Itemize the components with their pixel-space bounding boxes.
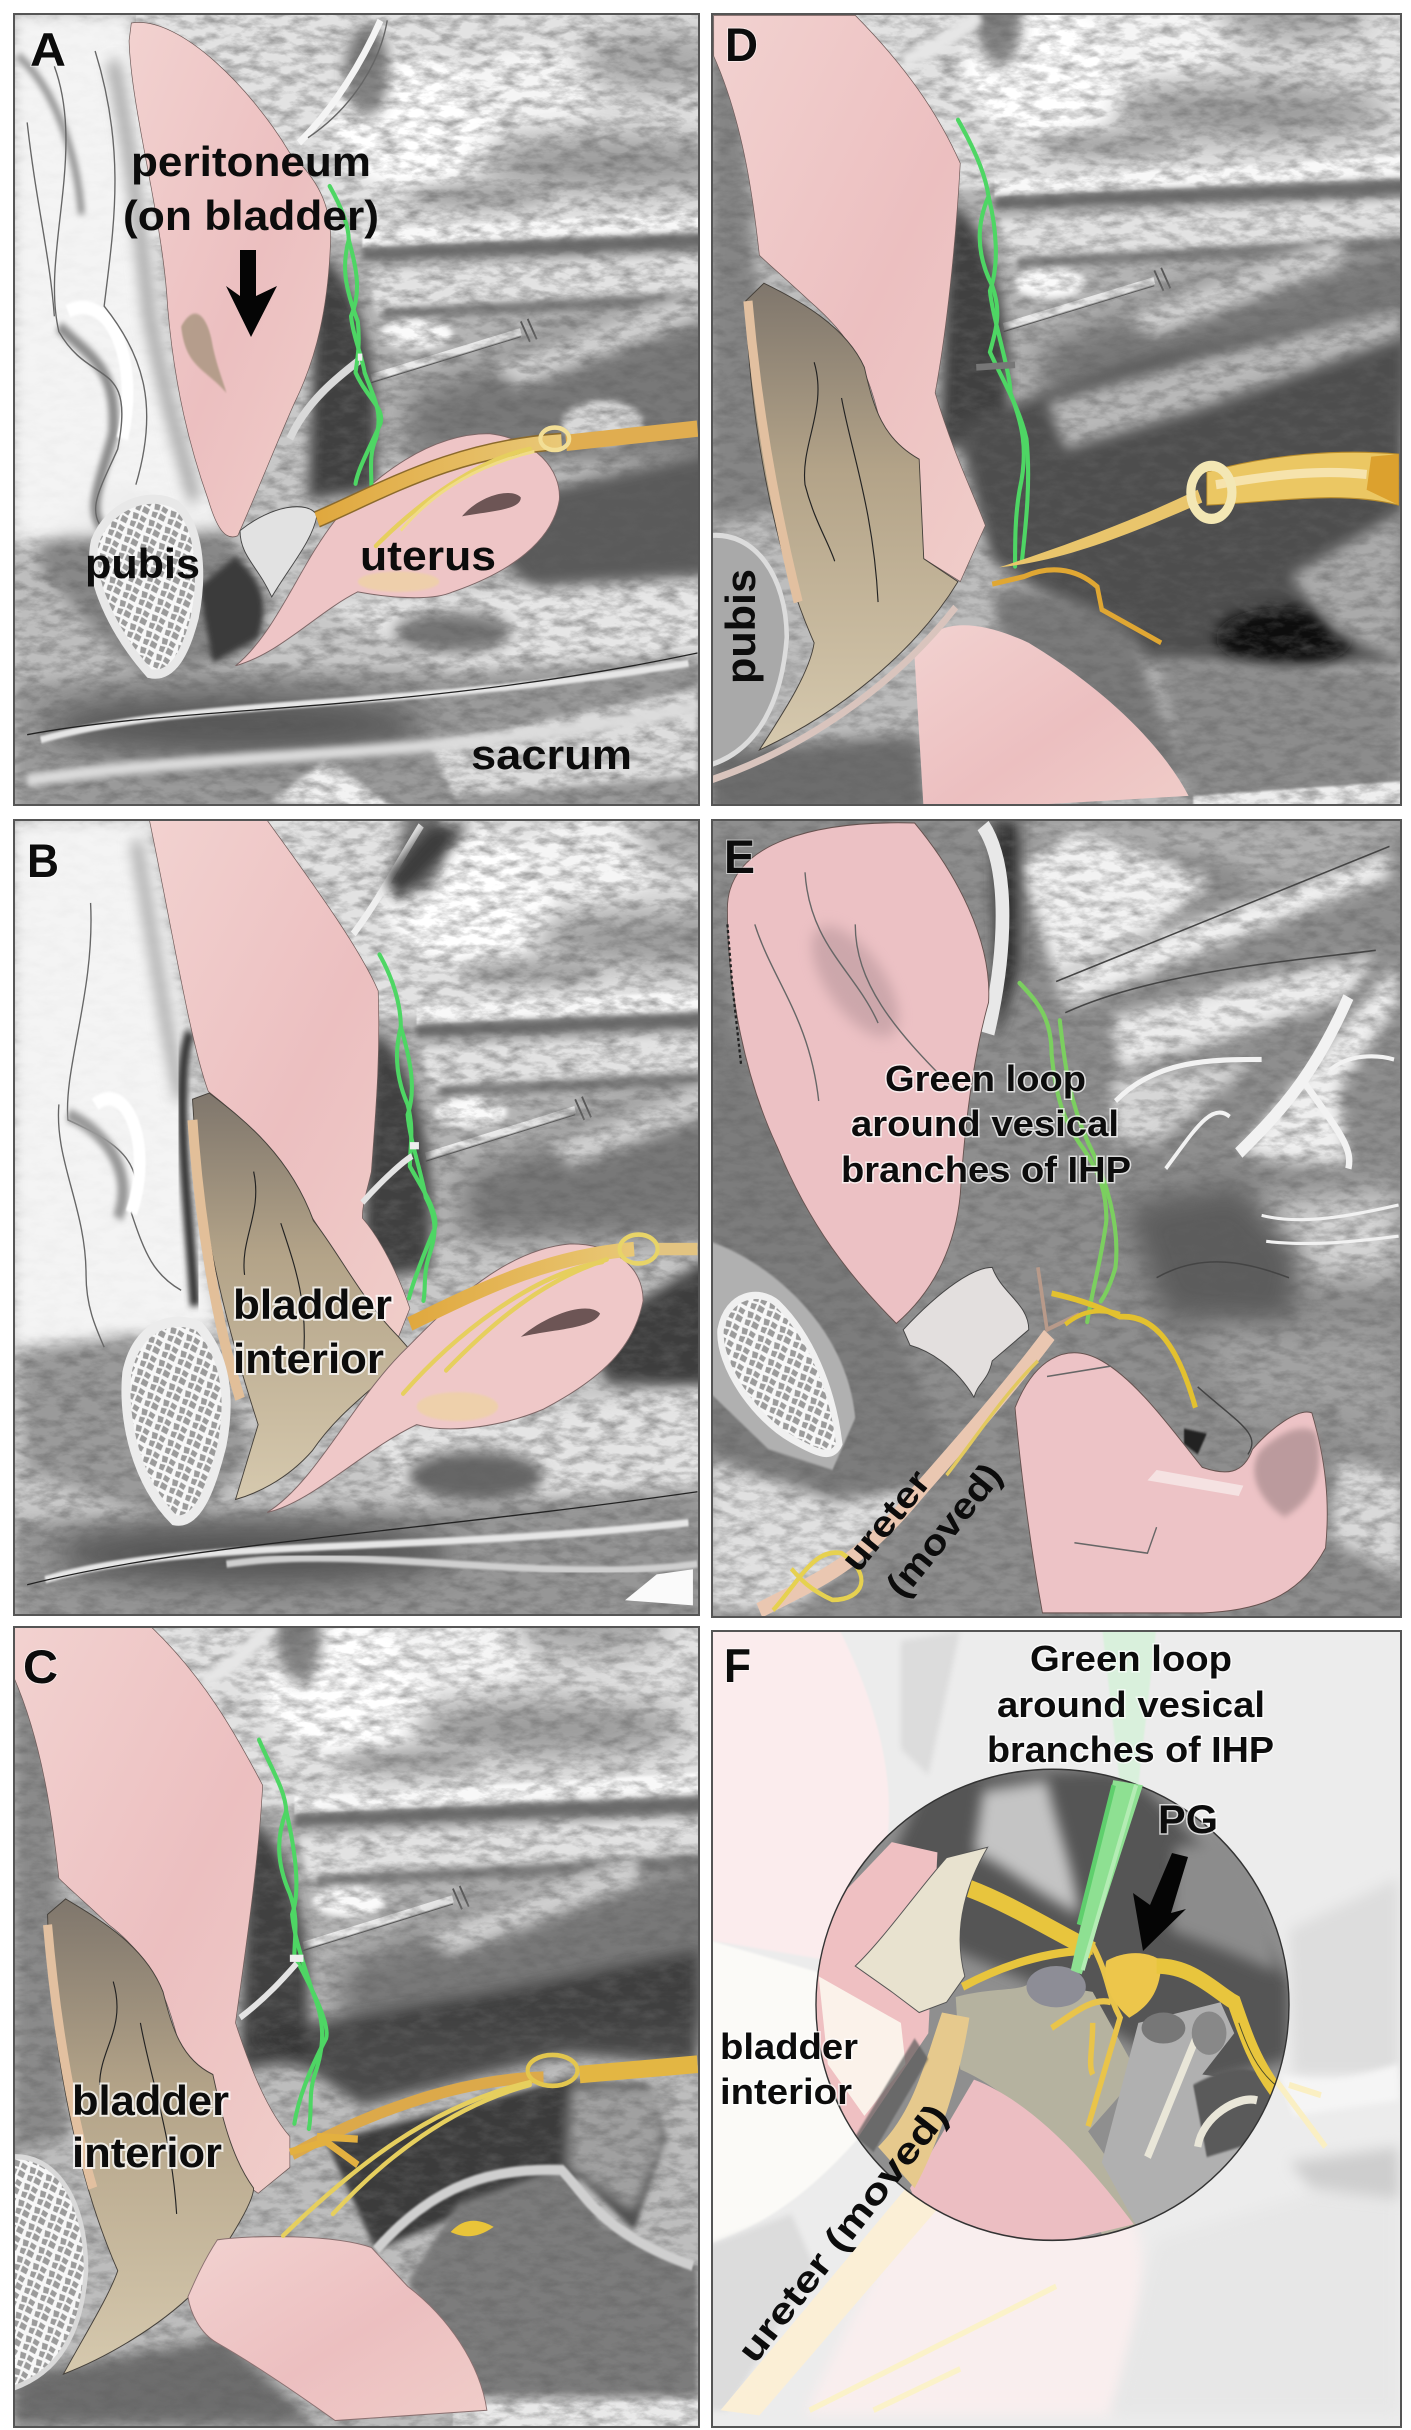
panel F labels: F xyxy=(724,1639,751,1692)
green loop straps xyxy=(1071,1780,1143,1974)
lower pink organ xyxy=(1015,1353,1327,1613)
panel F labels: ureter (moved) xyxy=(729,2096,956,2370)
panel E labels: (moved) xyxy=(877,1455,1010,1605)
white soft tissue left xyxy=(14,820,217,1347)
panel E labels: branches of IHP xyxy=(841,1149,1131,1190)
panel F labels: interior xyxy=(720,2071,852,2112)
white soft tissue left xyxy=(14,15,226,541)
circle contents xyxy=(810,1765,1294,2245)
panel F labels xyxy=(720,1638,1274,2370)
circle outline xyxy=(816,1769,1289,2240)
fibre bundles xyxy=(1116,997,1399,1244)
peritoneum on bladder xyxy=(129,22,331,537)
tissue grain xyxy=(14,820,699,1615)
green loop xyxy=(330,186,381,485)
panel A labels: A xyxy=(30,23,66,76)
ureter and cuff xyxy=(999,452,1399,567)
panel D xyxy=(700,0,1411,821)
panel B labels: interior xyxy=(233,1335,384,1382)
green loop xyxy=(958,120,1028,566)
bladder wall xyxy=(714,15,985,582)
pubis bone xyxy=(720,1295,839,1453)
panel B anatomy xyxy=(14,820,697,1605)
panel D labels: D xyxy=(725,18,758,71)
panel C xyxy=(0,1460,838,2430)
panel A labels: uterus xyxy=(360,532,496,579)
bladder wall xyxy=(14,1625,290,2193)
ureter and nerves xyxy=(283,2055,697,2236)
panel B background tissue xyxy=(0,671,960,1636)
panel A labels: peritoneum xyxy=(131,138,371,185)
panel A labels: pubis xyxy=(85,540,200,587)
panel E labels: Green loop xyxy=(885,1058,1086,1099)
panel F labels: around vesical xyxy=(997,1684,1265,1725)
lower pink organ xyxy=(188,2237,487,2421)
panel A labels xyxy=(30,23,632,778)
panel C background tissue xyxy=(0,1460,838,2430)
green loop xyxy=(240,1740,327,2129)
panel F labels: Green loop xyxy=(1030,1638,1232,1679)
panel E background tissue xyxy=(700,810,1411,1642)
panel C labels: C xyxy=(23,1640,58,1693)
pubis bone xyxy=(93,499,199,674)
panel A anatomy xyxy=(14,15,697,781)
uterus xyxy=(236,434,559,666)
bladder interior xyxy=(746,283,958,750)
green loop xyxy=(1020,983,1116,1322)
uterus xyxy=(267,1244,643,1512)
floor bands xyxy=(41,663,688,740)
arrow: peritoneum pointer xyxy=(226,250,277,337)
yellow hypogastric nerve xyxy=(1052,1293,1195,1408)
panel B labels: bladder xyxy=(233,1281,392,1328)
tissue grain xyxy=(14,1627,699,2427)
ureter xyxy=(317,428,697,546)
panel E labels: around vesical xyxy=(851,1103,1119,1144)
panel F xyxy=(700,1620,1411,2430)
panel E labels: ureter xyxy=(832,1462,938,1579)
panel C labels: bladder xyxy=(72,2077,229,2124)
magnified circle view xyxy=(810,1765,1294,2245)
lower pink organ xyxy=(915,625,1189,811)
panel A labels: (on bladder) xyxy=(123,192,379,239)
ureter xyxy=(403,1235,697,1394)
yellow hypogastric plexus xyxy=(963,1889,1275,2126)
panel D labels xyxy=(717,18,764,684)
panel B labels: B xyxy=(27,834,59,887)
bladder interior xyxy=(192,1093,410,1500)
panel F labels: branches of IHP xyxy=(987,1729,1274,1770)
panel E xyxy=(700,810,1411,1642)
panel B labels xyxy=(27,834,392,1382)
tissue grain xyxy=(14,14,699,805)
panel D background tissue xyxy=(700,0,1411,821)
tissue grain xyxy=(712,820,1401,1617)
panel A labels: sacrum xyxy=(471,731,632,778)
bladder interior xyxy=(48,1899,254,2374)
panel E labels xyxy=(724,830,1131,1605)
pelvic nerve branch xyxy=(992,570,1161,643)
panel F labels: bladder xyxy=(720,2026,858,2067)
arrow: points to pelvic ganglion xyxy=(1133,1853,1188,1951)
panel D labels: pubis xyxy=(717,569,764,684)
panel E anatomy xyxy=(709,823,1399,1613)
bone fragment xyxy=(9,2157,86,2390)
bladder wall xyxy=(149,820,410,1337)
panel F labels: PG xyxy=(1158,1798,1218,1842)
green loop xyxy=(362,955,435,1301)
panel A xyxy=(13,13,700,806)
faded surrounding anatomy xyxy=(700,1620,1411,2430)
pubis bone xyxy=(126,1322,226,1521)
panel C anatomy xyxy=(9,1625,697,2421)
ureter (moved) xyxy=(759,1267,1079,1610)
panel D anatomy xyxy=(709,15,1399,811)
panel E labels: E xyxy=(724,830,755,883)
upper pink organ xyxy=(727,823,989,1323)
panel C labels: interior xyxy=(72,2129,222,2176)
tissue grain xyxy=(712,14,1401,805)
panel C labels xyxy=(23,1640,229,2176)
panel A background tissue xyxy=(15,15,698,804)
pale soft tissue fold xyxy=(240,507,317,597)
panel B xyxy=(13,819,700,1616)
pubis bone fragment xyxy=(709,535,787,765)
